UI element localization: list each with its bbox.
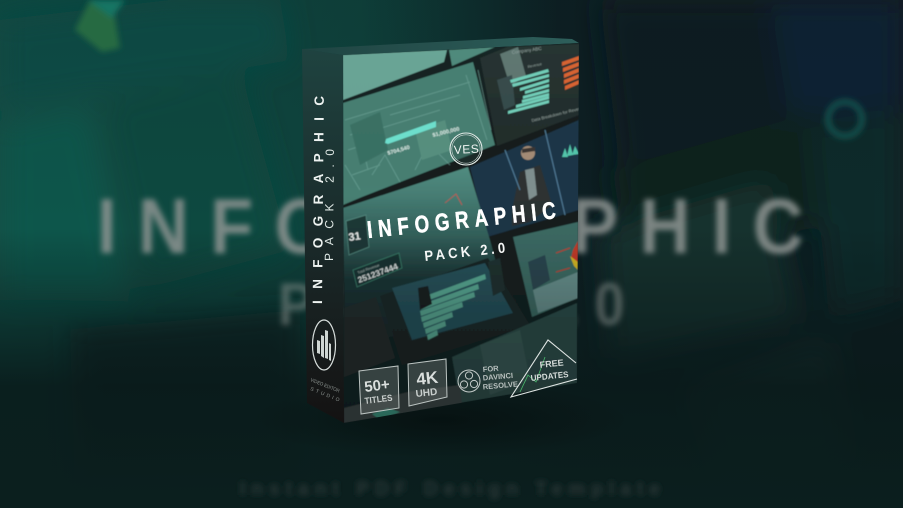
blurred pie [75,0,125,52]
DaVinci text [482,364,518,391]
product box [302,37,586,430]
badge: 4K UHD: UHD [415,387,438,400]
chart labels: Company ABC [511,46,543,55]
box drop shadow [250,382,630,458]
panel: chart slide [380,258,530,365]
free updates badge [511,340,577,397]
green bars [420,274,486,340]
panel: bottom strip [344,385,462,423]
panel: speaker slide [470,120,579,237]
badge: 4K UHD [408,359,447,406]
panel: meeting room slide [513,222,578,317]
spine brand text: VIDEO EDITOR [309,377,341,395]
teal bars [508,69,549,114]
spine title: INFOGRAPHIC [310,96,327,304]
blurred background heading: INFOGRAPHIC [97,183,804,270]
chart labels: Data Breakdown for Revenue [531,105,586,123]
panel: company bar chart [480,44,586,146]
panel: crowd chart photo [343,62,495,205]
spine subtitle: PACK 2.0 [322,149,337,261]
panel: dark left photo [344,309,395,377]
VES logo [450,133,482,165]
badge: 50+ titles [359,366,399,414]
free updates badge: UPDATES [530,369,569,383]
progress bar [385,121,436,144]
box subtitle: PACK 2.0 [424,240,506,264]
gradient wash [340,40,585,430]
DaVinci text: DAVINCI [482,371,513,382]
spine brand text: STUDIO [309,386,340,404]
icon: spine bars logo [312,320,336,370]
blurred background caption: Instant PDF Design Template [240,479,660,500]
date card: 31 [348,230,362,244]
progress labels: $704,540 [387,145,411,157]
box front face [340,40,586,430]
box title: INFOGRAPHIC [366,197,557,244]
badge: 50+ titles: TITLES [364,393,393,406]
DaVinci text: RESOLVE [482,379,518,391]
badge: 4K UHD: 4K [415,368,440,389]
icon: DaVinci Resolve [458,370,480,392]
box spine [302,49,344,423]
presenter [418,286,432,310]
panel: total counter: 251237444 [356,261,399,285]
blurred background heading [97,183,804,339]
panel: total counter [353,253,402,287]
pie chart fragment [571,241,578,264]
panel: bottom right slide [452,303,577,403]
panel: top-left teal photo [343,50,447,100]
orange bars [562,56,579,90]
chart labels: Revenue [527,62,542,69]
free updates badge: FREE [539,358,564,370]
spine brand text [309,377,341,404]
line chart dots [445,194,462,205]
DaVinci text: FOR [482,364,500,374]
date card [346,215,369,255]
progress labels: $1,000,000 [432,126,460,139]
chart labels [512,46,579,122]
panel: title backing slide [343,166,496,337]
VES logo: VES [453,142,479,157]
progress labels [387,126,460,157]
box top face [302,37,579,55]
badge: 50+ titles: 50+ [363,376,391,396]
blurred background heading: PACK 2.0 [278,271,625,339]
panel: total counter: Total Revenue [357,263,380,275]
blurred donut [828,102,862,136]
